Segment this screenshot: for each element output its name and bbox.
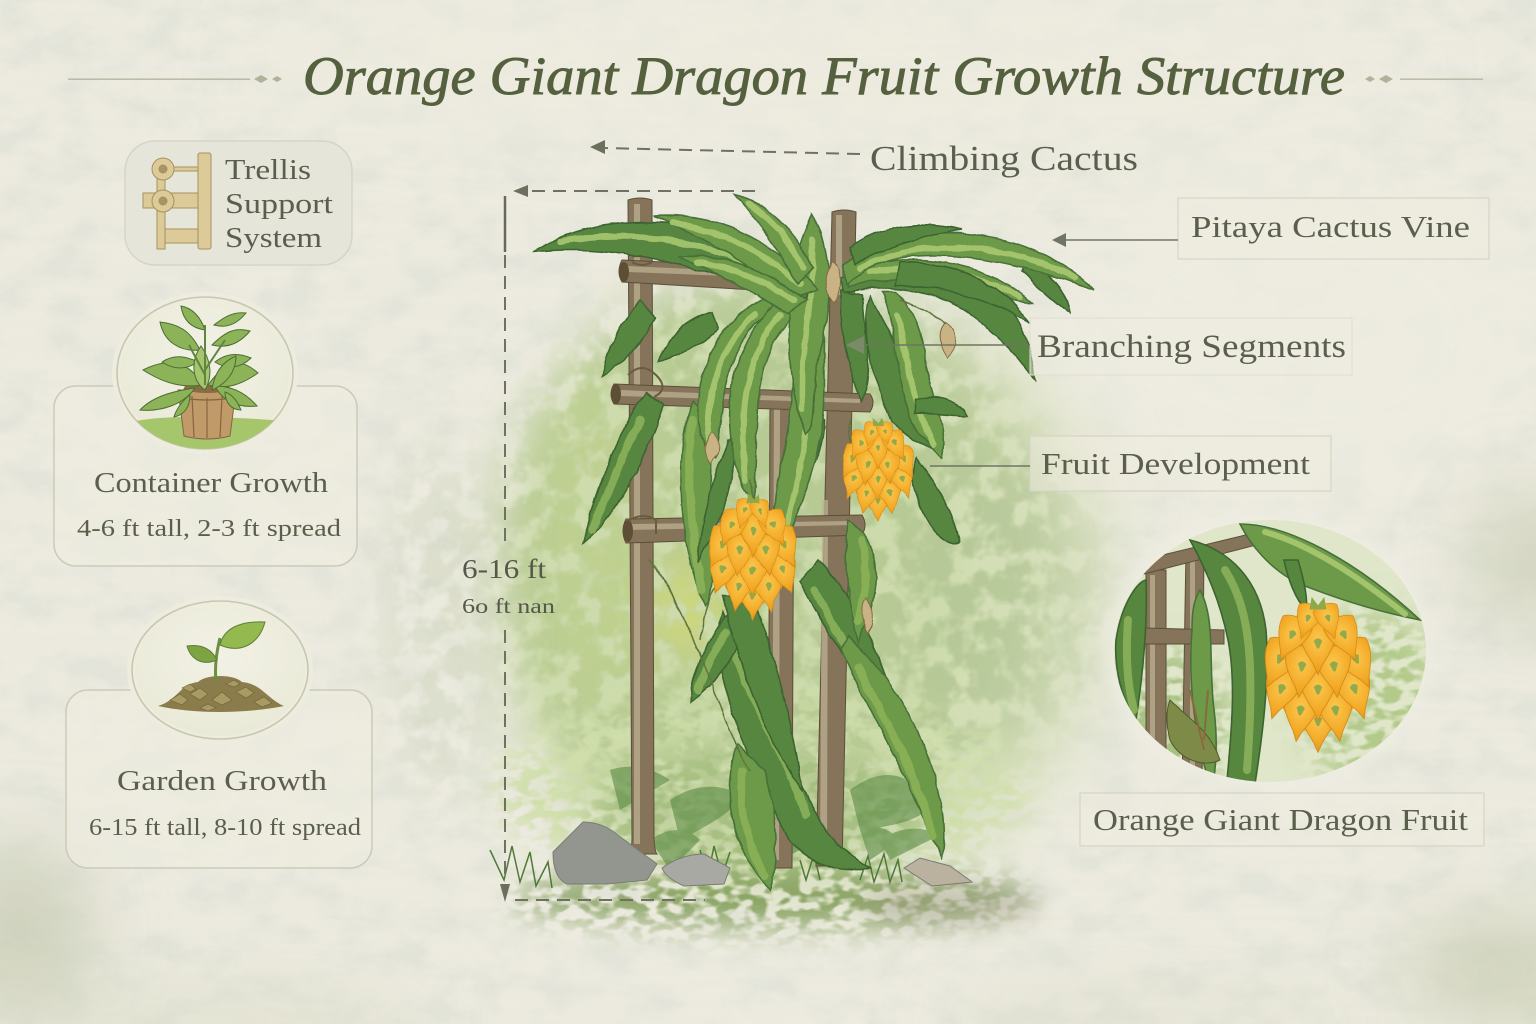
inset: fruit detail (1106, 512, 1440, 790)
title ornament left (68, 75, 282, 83)
text: garden heading: Garden Growth (117, 765, 328, 797)
text: container sizes: 4-6 ft tall, 2-3 ft spread (77, 516, 341, 542)
text: garden sizes: 6-15 ft tall, 8-10 ft spread (89, 815, 361, 841)
fruit: upper (833, 418, 923, 521)
callout: climbing cactus: Climbing Cactus (870, 139, 1138, 178)
text: trellis label: Trellis (225, 154, 311, 186)
text: trellis label (225, 154, 333, 254)
panel: container growth (54, 296, 357, 566)
hanging lower stems (690, 520, 944, 890)
title ornament right (1365, 75, 1483, 83)
fruit: inset (1251, 597, 1385, 752)
illustration: trellis frame (611, 198, 873, 868)
icon: trellis (143, 153, 211, 249)
text: height value: 6-16 ft (462, 554, 547, 584)
height dimension marker (462, 185, 755, 902)
callout: pitaya cactus vine (1052, 198, 1489, 259)
illustration: dragon fruit vine (532, 194, 1095, 890)
callout: climbing cactus (590, 139, 1138, 178)
fruit: lower (698, 494, 808, 621)
text: trellis label: Support (225, 188, 333, 220)
left hanging stems (583, 300, 736, 606)
callout: branching segments: Branching Segments (1037, 329, 1346, 365)
callout: orange giant dragon fruit (1080, 793, 1484, 846)
text: height note: 6o ft nan (462, 594, 556, 618)
right hanging stems (841, 290, 968, 544)
icon: potted plant (116, 296, 294, 461)
central hanging stems (698, 213, 829, 552)
panel: trellis support system (125, 141, 352, 265)
callout: fruit development: Fruit Development (1041, 446, 1310, 481)
callout: fruit development (930, 436, 1331, 491)
panel: garden growth (66, 600, 372, 868)
callout: pitaya cactus vine: Pitaya Cactus Vine (1191, 209, 1470, 244)
crown stems (532, 194, 1095, 380)
callout: orange giant dragon fruit: Orange Giant Dragon Fruit (1093, 802, 1468, 837)
text: container heading: Container Growth (94, 468, 328, 499)
rocks (553, 822, 972, 886)
title: Orange Giant Dragon Fruit Growth Structure (303, 46, 1345, 106)
foliage backdrop (380, 270, 1100, 926)
flower buds (706, 262, 955, 634)
icon: seedling (131, 600, 309, 740)
callout: branching segments (846, 318, 1352, 375)
text: trellis label: System (225, 222, 322, 254)
